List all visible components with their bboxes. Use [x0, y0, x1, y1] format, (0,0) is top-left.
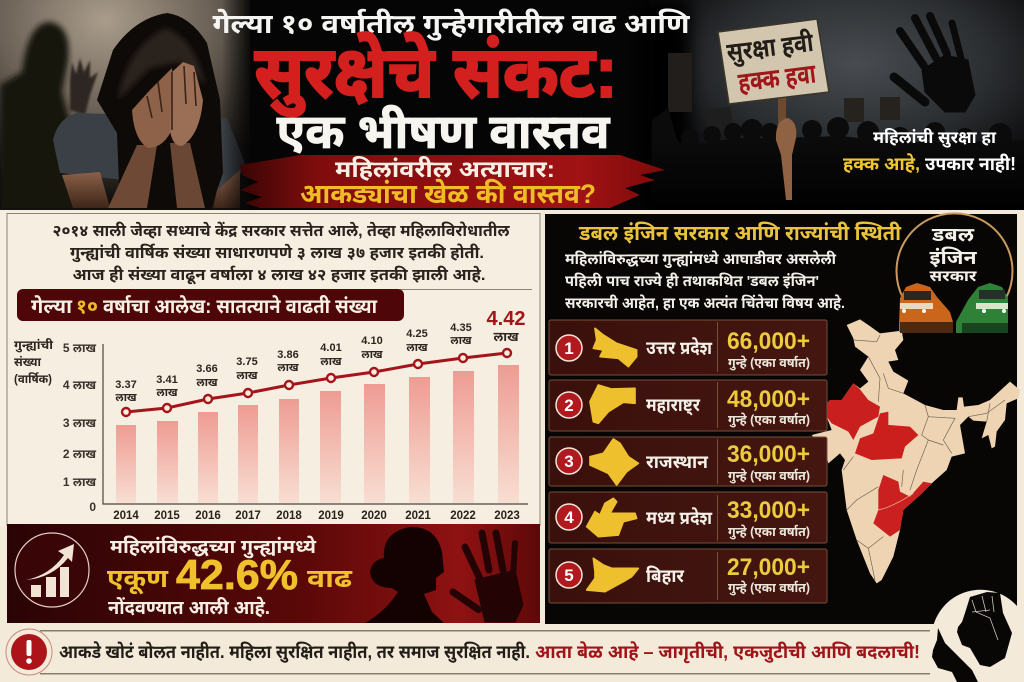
intro text: २०१४ साली जेव्हा सध्याचे केंद्र सरकार सत्तेत आले, तेव्हा महिलाविरोधातील	[52, 221, 510, 240]
panel: 42.6 percent callout	[7, 524, 540, 623]
x axis years: 2020	[361, 510, 387, 522]
emblem: women silhouettes with fist	[932, 590, 1024, 682]
value labels: लाख	[320, 356, 342, 368]
y axis labels: 2 लाख	[63, 447, 96, 461]
y axis title: (वार्षिक)	[14, 372, 52, 386]
row 3 Rajasthan: 3	[564, 452, 574, 471]
value labels: 4.35	[450, 322, 472, 334]
subtitle brush banner: महिलांवरील अत्याचार:	[335, 156, 555, 182]
photo: woman covering face	[0, 0, 254, 210]
x axis years: 2019	[318, 510, 344, 522]
row 3 Rajasthan: 36,000+	[727, 441, 810, 468]
y axis title: संख्या	[14, 355, 41, 369]
slogan text	[843, 127, 1016, 174]
trend line	[122, 349, 511, 416]
value labels: 3.75	[236, 356, 258, 368]
panel description: सरकारची आहेत, हा एक अत्यंत चिंतेचा विषय आहे.	[565, 294, 845, 312]
x axis years: 2021	[405, 510, 431, 522]
placard	[718, 19, 829, 104]
row 3 Rajasthan: राजस्थान	[646, 452, 709, 472]
row 5 Bihar: 27,000+	[727, 554, 810, 581]
value labels: लाख	[236, 370, 258, 382]
row 1 Uttar Pradesh: 66,000+	[727, 328, 810, 355]
row 5 Bihar: बिहार	[646, 566, 685, 586]
value labels: 4.10	[361, 335, 383, 347]
y axis labels: 5 लाख	[63, 341, 96, 355]
icon: rising chart	[15, 533, 89, 607]
value labels: लाख	[361, 349, 383, 361]
value labels: 3.86	[277, 349, 299, 361]
map: Rajasthan highlighted	[824, 383, 880, 440]
row 4 Madhya Pradesh: गुन्हे (एका वर्षात)	[728, 524, 810, 541]
row 5 Bihar: 5	[564, 566, 574, 585]
title block: गेल्या १० वर्षातील गुन्हेगारीतील वाढ आणि	[212, 8, 691, 40]
bars	[116, 365, 519, 503]
chart heading bar: वर्षाचा आलेख: सातत्याने वाढती संख्या	[103, 294, 378, 318]
value labels: 3.41	[156, 374, 178, 386]
map of India	[812, 319, 1020, 583]
icon: green locomotive	[956, 283, 1008, 333]
value labels: 3.66	[196, 363, 218, 375]
y axis title: गुन्ह्यांची	[14, 337, 53, 354]
row 1 Uttar Pradesh	[549, 320, 827, 375]
row 4 Madhya Pradesh: मध्य प्रदेश	[646, 508, 713, 528]
footer message: आता बेळ आहे – जागृतीची, एकजुटीची आणि बदलाची!	[535, 642, 920, 663]
callout text: 42.6%	[176, 551, 298, 598]
x axis years: 2014	[113, 510, 139, 522]
y axis labels: 3 लाख	[63, 416, 96, 430]
row 2 Maharashtra: 2	[564, 396, 574, 415]
raised arm	[776, 98, 796, 200]
value labels: लाख	[406, 342, 428, 354]
icon: dark red handprint	[453, 533, 523, 622]
silhouette: woman profile	[365, 527, 444, 623]
y axis labels: 0	[89, 500, 96, 514]
y axis title	[14, 337, 53, 386]
icon: warning	[6, 629, 52, 675]
placard: सुरक्षा हवी	[725, 27, 816, 68]
footer message	[59, 642, 920, 663]
value labels: लाख	[156, 387, 178, 399]
title block: सुरक्षेचे संकट:	[254, 32, 618, 117]
callout text	[107, 535, 354, 619]
header band	[0, 0, 1024, 210]
badge text: सरकार	[930, 268, 977, 285]
y axis labels	[63, 341, 96, 514]
row 3 Rajasthan: गुन्हे (एका वर्षात)	[728, 468, 810, 485]
icon: orange locomotive	[899, 283, 953, 333]
chart heading bar	[17, 289, 404, 321]
x axis years: 2018	[276, 510, 302, 522]
footer strip	[0, 590, 1024, 682]
state rows	[549, 320, 827, 603]
x axis years: 2023	[494, 510, 520, 522]
badge text	[930, 225, 977, 285]
row 2 Maharashtra: 48,000+	[727, 386, 810, 413]
panel: left trend	[0, 210, 541, 526]
value labels: 4.25	[406, 328, 428, 340]
subtitle brush banner	[240, 155, 665, 209]
row 3 Rajasthan	[549, 437, 827, 486]
row 1 Uttar Pradesh: उत्तर प्रदेश	[646, 338, 713, 358]
callout text: वाढ	[307, 563, 354, 593]
panel heading: डबल इंजिन सरकार आणि राज्यांची स्थिती	[578, 221, 902, 245]
chart heading bar: गेल्या	[31, 294, 73, 318]
callout text: एकूण	[107, 563, 169, 595]
panel description: पहिली पाच राज्ये ही तथाकथित 'डबल इंजिन'	[565, 272, 819, 290]
row 4 Madhya Pradesh: 33,000+	[727, 497, 810, 524]
value labels: लाख	[450, 335, 472, 347]
callout text: महिलांविरुद्धच्या गुन्ह्यांमध्ये	[110, 535, 317, 559]
row 2 Maharashtra: गुन्हे (एका वर्षात)	[728, 412, 810, 429]
value labels: 4.01	[320, 342, 342, 354]
row 2 Maharashtra	[549, 380, 827, 431]
row 1 Uttar Pradesh: गुन्हे (एका वर्षात)	[728, 355, 810, 372]
x axis years	[113, 510, 520, 522]
intro text: आज ही संख्या वाढून वर्षाला ४ लाख ४२ हजार इतकी झाली आहे.	[72, 265, 486, 285]
x axis years: 2022	[450, 510, 476, 522]
intro text: गुन्ह्यांची वार्षिक संख्या साधारणपणे ३ लाख ३७ हजार इतकी होती.	[70, 243, 484, 263]
panel description	[565, 250, 845, 312]
slogan text: उपकार नाही!	[925, 154, 1016, 174]
slogan text: हक्क आहे,	[843, 154, 920, 174]
row 5 Bihar	[549, 549, 827, 603]
row 4 Madhya Pradesh	[549, 492, 827, 543]
value labels: लाख	[493, 329, 519, 344]
panel: double engine states	[541, 210, 1024, 630]
slogan text: महिलांची सुरक्षा हा	[873, 127, 997, 148]
map: Andhra and Telangana highlighted	[873, 475, 932, 537]
value labels: लाख	[277, 362, 299, 374]
photo: protest crowd and sign	[640, 0, 1024, 210]
icon: black handprint	[894, 16, 975, 112]
x axis years: 2015	[154, 510, 180, 522]
chart heading bar: १०	[76, 296, 98, 318]
badge text: इंजिन	[930, 247, 977, 269]
row 2 Maharashtra: महाराष्ट्र	[646, 395, 701, 416]
y axis labels: 1 लाख	[63, 475, 96, 489]
x axis years: 2017	[235, 510, 261, 522]
bar and line chart	[14, 308, 528, 522]
panel description: महिलांविरुद्धच्या गुन्ह्यांमध्ये आघाडीवर असलेली	[565, 250, 837, 269]
footer message: आकडे खोटं बोलत नाहीत. महिला सुरक्षित नाहीत, तर समाज सुरक्षित नाही.	[59, 642, 530, 663]
row 5 Bihar: गुन्हे (एका वर्षात)	[728, 580, 810, 597]
value labels: लाख	[115, 392, 137, 404]
value labels	[115, 308, 525, 404]
map: Madhya Pradesh highlighted	[855, 412, 918, 460]
x axis years: 2016	[195, 510, 221, 522]
value labels: 3.37	[115, 379, 137, 391]
row 4 Madhya Pradesh: 4	[564, 508, 574, 527]
intro text	[52, 221, 510, 285]
badge: double engine	[896, 213, 1013, 333]
row 1 Uttar Pradesh: 1	[564, 339, 574, 358]
callout text: नोंदवण्यात आली आहे.	[108, 596, 270, 619]
subtitle brush banner: आकड्यांचा खेळ की वास्तव?	[300, 178, 596, 209]
badge text: डबल	[931, 225, 975, 246]
crowd silhouettes	[650, 108, 1024, 210]
value labels: 4.42	[487, 308, 525, 330]
value labels: लाख	[196, 377, 218, 389]
title block	[212, 8, 691, 159]
y axis labels: 4 लाख	[63, 378, 96, 392]
placard: हक्क हवा	[736, 58, 818, 98]
title block: एक भीषण वास्तव	[276, 105, 610, 159]
